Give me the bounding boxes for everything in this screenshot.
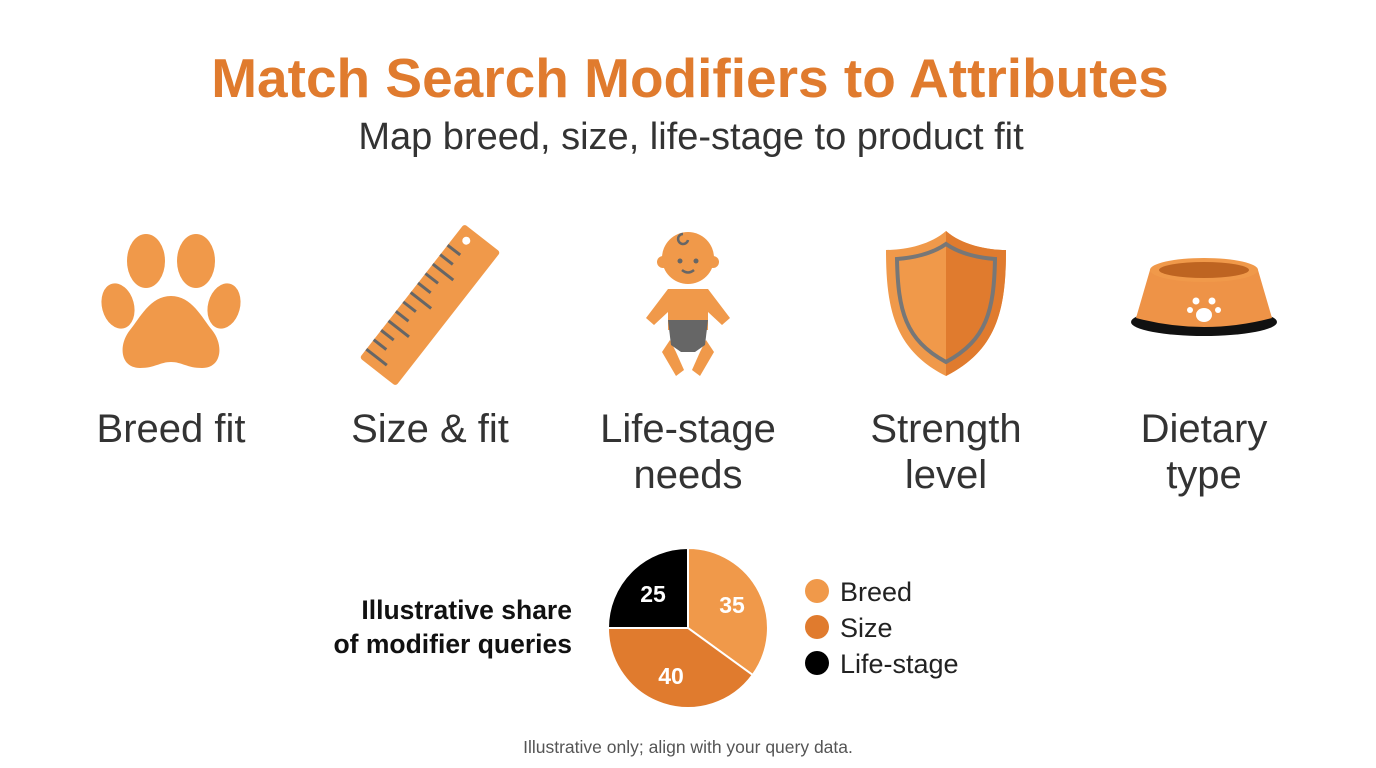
icon: shield: [886, 231, 1006, 376]
label: life-stage needs: needs: [634, 453, 742, 497]
label: dietary type: Dietary: [1141, 407, 1267, 451]
footer note: Illustrative only; align with your query data.: [523, 737, 853, 757]
icon: paw: [97, 234, 245, 368]
legend: Size: [840, 613, 893, 643]
pie chart: [608, 548, 768, 708]
label: life-stage needs: [600, 407, 776, 497]
title: Match Search Modifiers to Attributes: [211, 47, 1169, 109]
icon: baby: [646, 232, 730, 376]
chart caption: of modifier queries: [333, 629, 572, 659]
label: strength level: level: [905, 453, 987, 497]
chart caption: Illustrative share: [361, 595, 572, 625]
pie chart: 35: [719, 592, 745, 618]
pie chart: 25: [640, 581, 666, 607]
subtitle: Map breed, size, life-stage to product fit: [358, 116, 1024, 158]
legend: [805, 577, 959, 679]
label: dietary type: [1141, 407, 1268, 497]
icon: ruler: [360, 224, 500, 386]
label: strength level: [870, 407, 1022, 497]
legend: Life-stage: [840, 649, 959, 679]
label: size & fit: Size & fit: [351, 407, 509, 451]
legend: Breed: [840, 577, 912, 607]
chart caption: [333, 595, 572, 659]
label: breed fit: Breed fit: [97, 407, 245, 451]
icon: bowl: [1131, 258, 1277, 336]
label: life-stage needs: Life-stage: [600, 407, 776, 451]
pie chart: 40: [658, 663, 684, 689]
label: dietary type: type: [1166, 453, 1242, 497]
label: strength level: Strength: [870, 407, 1022, 451]
